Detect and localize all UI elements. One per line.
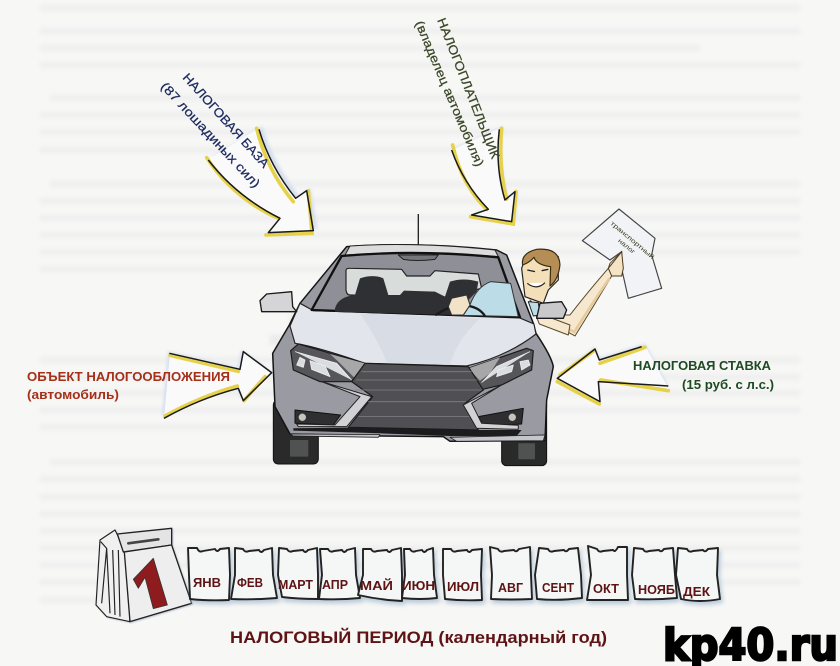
right mirror [537,302,567,318]
page [443,549,482,600]
driver arm [548,252,623,336]
grille [348,363,483,430]
month pages [188,546,720,601]
left fog light [295,410,341,425]
left air intake trim [297,382,372,427]
month names: ИЮЛ [447,580,479,594]
seats [335,276,478,315]
month names: ЯНВ [193,576,221,590]
right air intake trim [463,385,518,429]
label: tax base: (87 лошадиных сил) [158,79,263,191]
driver hands [448,295,470,315]
steering wheel [435,305,485,316]
month names: ОКТ [593,582,619,596]
hood [290,303,536,366]
page [535,548,582,600]
label: tax rate [633,358,774,392]
calendar block [96,528,192,622]
fog lamp lenses [298,413,516,421]
arrow: tax base [207,126,317,235]
driver head [522,249,560,303]
back pages [96,530,130,622]
tax document: налог [616,237,637,256]
driver torso [463,282,518,317]
rear window [346,268,482,297]
month names: ФЕВ [237,576,263,590]
right wheel [502,400,547,466]
left headlight [291,344,365,382]
page [632,548,677,599]
month names [193,576,710,599]
rear view mirror [398,255,438,260]
date page [124,545,192,622]
page [490,547,532,600]
car body [273,245,553,441]
month names: МАЙ [360,578,393,593]
binding [117,528,172,552]
label: taxation object: (автомобиль) [27,387,119,402]
month names: АВГ [498,581,523,595]
month names: НОЯБ [638,583,675,597]
month names: СЕНТ [542,581,574,595]
month names: ДЕК [683,585,710,599]
month names: АПР [322,578,348,592]
month names: ИЮН [402,579,435,593]
label: tax base: НАЛОГОВАЯ БАЗА [180,71,272,171]
page [231,548,277,599]
label: taxation object: ОБЪЕКТ НАЛОГООБЛОЖЕНИЯ [27,369,230,384]
label: taxpayer [412,16,502,169]
page [278,548,318,599]
tax document [582,209,662,298]
windshield [312,253,520,317]
arrow: tax rate [557,344,668,404]
arrow: taxation object [162,350,272,418]
left mirror [260,292,297,312]
label: taxpayer: НАЛОГОПЛАТЕЛЬЩИК [434,16,502,161]
label: tax rate: НАЛОГОВАЯ СТАВКА [633,358,772,373]
right fog light [478,408,523,426]
left wheel [273,400,318,464]
page [587,546,628,600]
tax period caption: НАЛОГОВЫЙ ПЕРИОД (календарный год) [230,628,607,647]
right mirror arm [530,300,570,335]
right pillar shirt [528,302,540,316]
label: tax base [158,71,272,191]
right headlight [468,348,533,390]
label: tax rate: (15 руб. с л.с.) [682,377,774,392]
antenna [416,214,420,247]
page [676,548,720,601]
month names: МАРТ [278,578,313,592]
roof [345,245,498,257]
page [402,548,437,599]
front splitter [293,428,522,436]
tax document: транспортный [609,219,656,261]
page [358,548,402,601]
arrow: taxpayer [452,126,518,224]
page [188,548,230,600]
lower lip [290,434,545,441]
label: taxpayer: (владелец автомобиля) [412,19,486,169]
tyre treads [290,440,535,459]
car with driver [260,214,570,466]
number 1 [133,558,167,609]
page [319,548,360,599]
label: taxation object [27,369,230,402]
